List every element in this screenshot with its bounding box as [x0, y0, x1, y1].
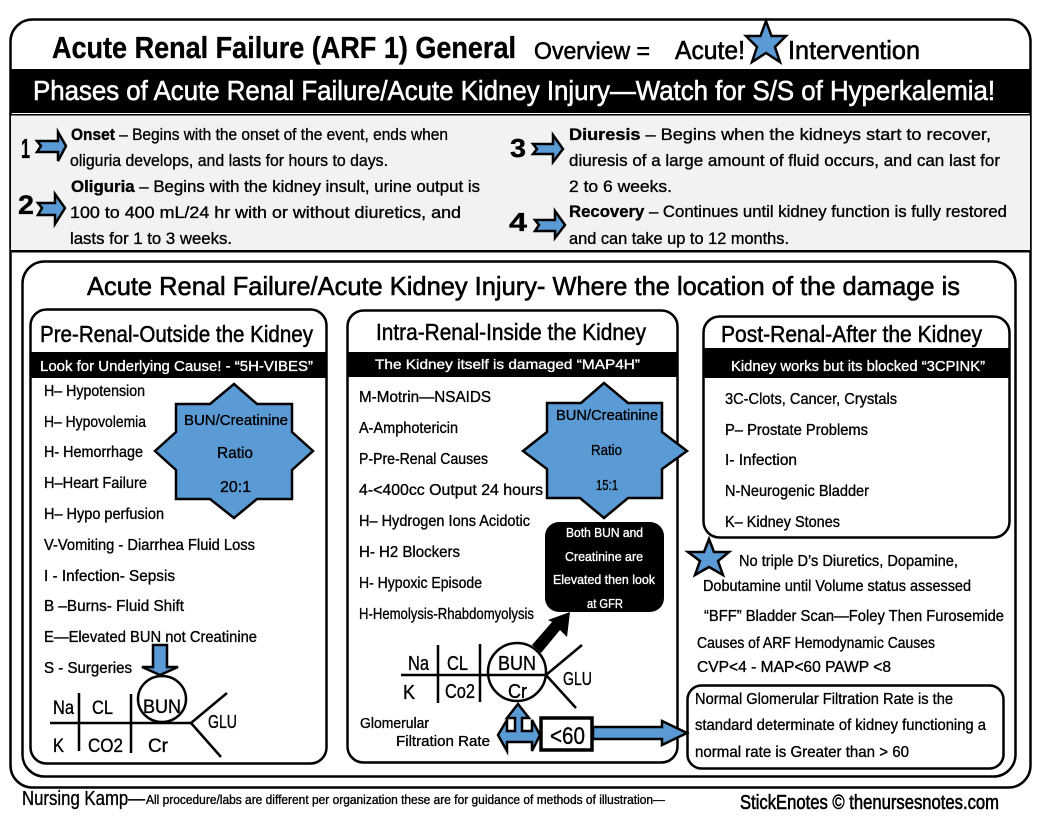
MAP4H list: 4-<400cc Output 24 hours [359, 482, 543, 499]
lab fishbone: pre-renal [50, 676, 237, 757]
5H-VIBES list: H- Hemorrhage [44, 444, 143, 461]
3CPINK list: P– Prostate Problems [725, 422, 868, 439]
footer left: Nursing Kamp— [22, 788, 145, 810]
callout: normal GFR: Normal Glomerular Filtration Rate is the [695, 691, 953, 708]
lab fishbone: pre-renal: GLU [208, 712, 237, 732]
notes: Causes of ARF Hemodynamic Causes [697, 635, 935, 652]
MAP4H list: P-Pre-Renal Causes [359, 451, 488, 468]
callout: normal GFR: normal rate is Greater than > 60 [695, 744, 909, 761]
5H-VIBES list: S - Surgeries [44, 660, 132, 677]
callout: GFR note: at GFR [587, 596, 623, 611]
5H-VIBES list: I - Infection- Sepsis [44, 568, 175, 585]
title: Overview = [534, 38, 650, 65]
3CPINK list: N-Neurogenic Bladder [725, 483, 870, 500]
location heading: Acute Renal Failure/Acute Kidney Injury- Where the location of the damage is [87, 271, 960, 301]
GFR label: Filtration Rate [396, 733, 490, 750]
footer right: StickEnotes © thenursesnotes.com [740, 792, 999, 814]
arrow: to GFR note [532, 612, 570, 653]
phase 3 diuresis: 3 [510, 133, 526, 163]
arrow: three-way GFR [498, 704, 540, 751]
phase 3 diuresis: diuresis of a large amount of fluid occurs, and can last for [569, 151, 1000, 170]
ratio badge 20:1: 20:1 [220, 479, 251, 496]
GFR label: Glomerular [360, 715, 429, 732]
phase 4 recovery: Recovery – Continues until kidney function is fully restored [569, 202, 1007, 221]
phase 4 recovery: 4 [509, 207, 528, 237]
lab fishbone: intra-renal: BUN [498, 653, 536, 675]
5H-VIBES list: B –Burns- Fluid Shift [44, 598, 185, 615]
phases banner: Phases of Acute Renal Failure/Acute Kidney Injury—Watch for S/S of Hyperkalemia! [33, 75, 995, 106]
phase 3 diuresis: 2 to 6 weeks. [569, 177, 672, 196]
phase 2 oliguria: 2 [18, 190, 34, 220]
phase 1 onset: Onset – Begins with the onset of the event, ends when [71, 125, 448, 144]
5H-VIBES list: E—Elevated BUN not Creatinine [44, 629, 257, 646]
GFR value box: <60 [550, 723, 585, 750]
panel: pre-renal [30, 310, 327, 764]
ratio badge 15:1: BUN/Creatinine [556, 407, 658, 424]
callout: GFR note: Both BUN and [566, 525, 643, 540]
title: Acute Renal Failure (ARF 1) General [52, 30, 516, 65]
5H-VIBES list: H–Heart Failure [44, 475, 147, 492]
ratio badge 15:1: Ratio [591, 442, 622, 459]
icon: title star [746, 21, 786, 62]
3CPINK list: 3C-Clots, Cancer, Crystals [725, 391, 897, 408]
notes [697, 553, 1004, 676]
lab fishbone: intra-renal: Co2 [445, 681, 475, 703]
callout: normal GFR [688, 686, 1004, 768]
title: Acute! [675, 35, 745, 65]
panel: post-renal [703, 316, 1010, 538]
MAP4H list: H- H2 Blockers [359, 544, 460, 561]
phase 2 oliguria: 100 to 400 mL/24 hr with or without diuretics, and [70, 203, 461, 222]
lab fishbone: intra-renal: K [403, 682, 416, 704]
lab fishbone: intra-renal: Na [408, 653, 430, 675]
lab fishbone: pre-renal: Na [53, 698, 74, 719]
lab fishbone: intra-renal [401, 643, 592, 708]
notes: Dobutamine until Volume status assessed [703, 578, 971, 595]
lab fishbone: intra-renal: GLU [563, 669, 592, 689]
ratio badge 15:1: 15:1 [596, 477, 618, 494]
MAP4H list: H– Hydrogen Ions Acidotic [359, 513, 530, 530]
callout: GFR note: Elevated then look [553, 572, 655, 587]
phase 2 oliguria: Oliguria – Begins with the kidney insult, urine output is [71, 177, 480, 196]
callout: GFR note: Creatinine are [565, 549, 643, 564]
GFR label [360, 715, 490, 750]
MAP4H list [359, 389, 543, 623]
panel: location of damage [22, 262, 1016, 776]
MAP4H list: H- Hypoxic Episode [359, 575, 482, 592]
pre-renal banner [30, 352, 327, 378]
footer left: All procedure/labs are different per organization these are for guidance of methods of illustration— [146, 793, 665, 807]
phase 4 recovery: and can take up to 12 months. [569, 229, 789, 248]
5H-VIBES list: H– Hypotension [44, 383, 145, 400]
phase 4 recovery [509, 202, 1007, 248]
lab fishbone: pre-renal: Cr [148, 736, 169, 757]
MAP4H list: A-Amphotericin [359, 420, 458, 437]
arrow: down to BUN [142, 645, 178, 675]
title [52, 30, 920, 65]
callout: normal GFR: standard determinate of kidney functioning a [695, 717, 986, 734]
3CPINK list: I- Infection [725, 452, 797, 469]
5H-VIBES list [44, 383, 257, 677]
intra-renal heading: Intra-Renal-Inside the Kidney [376, 319, 646, 345]
lab fishbone: intra-renal: Cr [508, 681, 527, 703]
title: Intervention [788, 35, 920, 65]
ratio badge 20:1: BUN/Creatinine [184, 412, 288, 429]
5H-VIBES list: H– Hypovolemia [44, 414, 146, 431]
panel: intra-renal [347, 310, 687, 762]
phases banner [11, 69, 1030, 113]
GFR value box [541, 718, 592, 750]
MAP4H list: M-Motrin—NSAIDS [359, 389, 491, 406]
lab fishbone: pre-renal: CO2 [88, 736, 123, 757]
lab fishbone: pre-renal: BUN [143, 697, 181, 718]
intra-renal banner: The Kidney itself is damaged “MAP4H” [375, 356, 640, 372]
phase 1 onset: oliguria develops, and lasts for hours to days. [70, 151, 388, 170]
5H-VIBES list: V-Vomiting - Diarrhea Fluid Loss [44, 537, 255, 554]
footer left [22, 788, 665, 810]
post-renal heading: Post-Renal-After the Kidney [721, 321, 982, 347]
phase 2 oliguria: lasts for 1 to 3 weeks. [70, 229, 232, 248]
MAP4H list: H-Hemolysis-Rhabdomyolysis [359, 606, 534, 623]
ratio badge 15:1 [523, 383, 687, 518]
lab fishbone: intra-renal: CL [447, 653, 468, 675]
lab fishbone: pre-renal: K [53, 736, 64, 757]
5H-VIBES list: H– Hypo perfusion [44, 506, 164, 523]
notes: CVP<4 - MAP<60 PAWP <8 [697, 659, 891, 676]
post-renal banner: Kidney works but its blocked “3CPINK” [731, 358, 985, 375]
icon: note star [688, 539, 729, 575]
arrow: to normal GFR [593, 721, 687, 745]
intra-renal banner [347, 352, 678, 377]
notes: No triple D’s Diuretics, Dopamine, [739, 553, 958, 570]
3CPINK list: K– Kidney Stones [725, 514, 840, 531]
pre-renal banner: Look for Underlying Cause! - “5H-VIBES” [40, 358, 313, 375]
3CPINK list [725, 391, 897, 531]
panel: phases [11, 114, 1030, 252]
phase 3 diuresis: Diuresis – Begins when the kidneys start to recover, [569, 125, 991, 144]
post-renal banner [703, 348, 1010, 378]
callout: GFR note [545, 522, 664, 612]
ratio badge 20:1 [155, 384, 313, 518]
phase 1 onset [21, 125, 448, 170]
phase 2 oliguria [18, 177, 480, 248]
phase 3 diuresis [510, 125, 1000, 196]
ratio badge 20:1: Ratio [217, 445, 253, 462]
pre-renal heading: Pre-Renal-Outside the Kidney [40, 321, 313, 347]
notes: “BFF” Bladder Scan—Foley Then Furosemide [704, 608, 1004, 625]
phase 1 onset: 1 [21, 133, 30, 164]
lab fishbone: pre-renal: CL [92, 698, 113, 719]
